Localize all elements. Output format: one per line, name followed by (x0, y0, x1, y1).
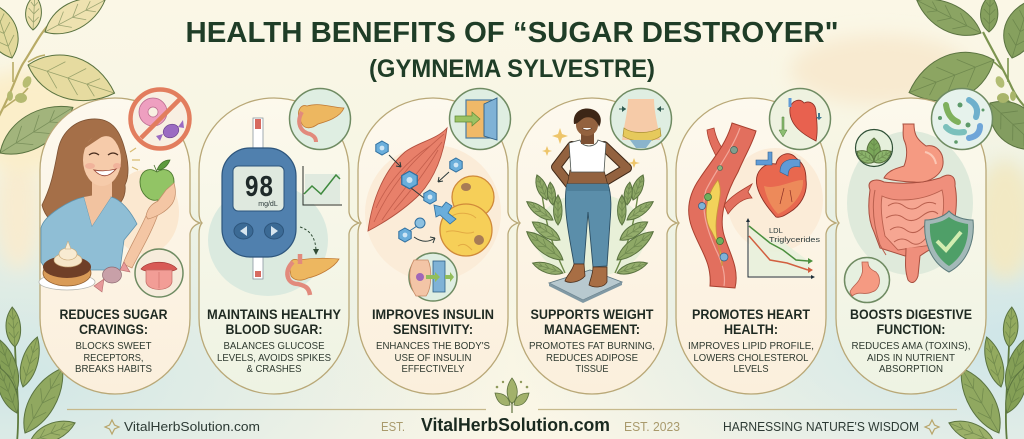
illustration: woman choosing apple over sweets (39, 119, 179, 292)
illustration: muscle and fat cells (365, 128, 501, 281)
chart: LDL and triglycerides falling: LDL (769, 226, 783, 235)
icon: tongue (135, 249, 183, 297)
text: improves insulin sensitivity: IMPROVES INSULIN (372, 307, 494, 322)
botanical: top-left leaves (0, 0, 121, 166)
text: promotes heart health (688, 307, 814, 375)
text: supports weight management (529, 307, 655, 375)
text: promotes heart health: IMPROVES LIPID PROFILE, (688, 340, 814, 352)
text: maintains healthy blood sugar: LEVELS, AVOIDS SPIKES (217, 352, 331, 364)
text: improves insulin sensitivity: SENSITIVITY: (393, 322, 473, 337)
chart: glucose trend (303, 166, 342, 205)
illustration: glucose meter: 98 (244, 171, 274, 206)
panel: reduces sugar cravings (39, 90, 200, 394)
chart: LDL and triglycerides falling: Triglycerides (769, 235, 820, 244)
text: supports weight management: PROMOTES FAT BURNING, (529, 340, 655, 352)
icon: waist measuring tape (610, 88, 672, 150)
text: promotes heart health: PROMOTES HEART (692, 307, 811, 322)
text: supports weight management: MANAGEMENT: (544, 322, 640, 337)
text: maintains healthy blood sugar: BALANCES GLUCOSE (224, 340, 324, 352)
panel: improves insulin sensitivity (358, 88, 518, 394)
text: boosts digestive function: AIDS IN NUTRIENT (867, 352, 956, 364)
icon: shield with check (925, 211, 973, 272)
illustration: glucose meter: mg/dL (258, 201, 278, 208)
text: improves insulin sensitivity (372, 307, 494, 375)
title: HEALTH BENEFITS OF “SUGAR DESTROYER" (186, 17, 838, 49)
footer center: brand: EST. 2023 (624, 419, 680, 434)
icon: stomach badge (844, 258, 890, 302)
illustration: woman on scale (542, 109, 640, 303)
title (186, 17, 838, 83)
text: reduces sugar cravings (60, 307, 168, 375)
text: promotes heart health: LEVELS (734, 363, 768, 375)
icon: pancreas bottom with dashed arrow (287, 227, 339, 295)
illustration: glucose meter (208, 118, 328, 296)
icon: no sweets (130, 90, 190, 148)
botanical: bottom-right plant (946, 307, 1024, 439)
text: maintains healthy blood sugar: BLOOD SUGAR: (226, 322, 322, 337)
text: reduces sugar cravings: CRAVINGS: (79, 322, 148, 337)
text: promotes heart health: LOWERS CHOLESTEROL (694, 352, 809, 364)
text: boosts digestive function: BOOSTS DIGESTIVE (850, 307, 972, 322)
text: boosts digestive function: ABSORPTION (879, 363, 943, 375)
text: supports weight management: REDUCES ADIPOSE (546, 352, 638, 364)
text: improves insulin sensitivity: ENHANCES THE BODY'S (376, 340, 490, 352)
icon: cell with door (409, 253, 457, 301)
panel: maintains healthy blood sugar (199, 88, 359, 394)
footer center: brand: EST. (381, 419, 405, 434)
text: maintains healthy blood sugar (207, 307, 341, 375)
icon: pancreas top (290, 88, 350, 150)
footer left: website: VitalHerbSolution.com (124, 419, 260, 434)
text: reduces sugar cravings: BLOCKS SWEET (76, 340, 152, 352)
panel: boosts digestive function (836, 88, 992, 394)
text: improves insulin sensitivity: EFFECTIVELY (402, 363, 464, 375)
text: maintains healthy blood sugar: MAINTAINS HEALTHY (207, 307, 341, 322)
text: boosts digestive function (850, 307, 972, 375)
text: boosts digestive function: REDUCES AMA (TOXINS), (852, 340, 970, 352)
chart: LDL and triglycerides falling (746, 218, 820, 279)
icon: footer sprig (495, 378, 529, 413)
botanical: bottom-left plant (0, 307, 78, 439)
illustration: heart (756, 152, 806, 217)
footer right: tagline: HARNESSING NATURE'S WISDOM (723, 419, 919, 434)
text: supports weight management: TISSUE (576, 363, 608, 375)
footer center: brand: VitalHerbSolution.com (421, 415, 610, 435)
icon: leaf badge (854, 130, 894, 167)
illustration: plants behind figure (522, 173, 657, 278)
icon: door with arrow (450, 88, 510, 150)
panel: supports weight management (517, 88, 677, 394)
title: (GYMNEMA SYLVESTRE) (369, 55, 655, 83)
text: improves insulin sensitivity: USE OF INSULIN (394, 352, 472, 364)
text: promotes heart health: HEALTH: (724, 322, 778, 337)
icon: gut bacteria (932, 88, 992, 150)
illustration: digestive system (847, 124, 973, 283)
text: boosts digestive function: FUNCTION: (876, 322, 946, 337)
illustration: artery with plaque (689, 123, 823, 288)
footer center: brand (381, 415, 680, 435)
text: reduces sugar cravings: BREAKS HABITS (75, 363, 152, 375)
text: reduces sugar cravings: REDUCES SUGAR (60, 307, 168, 322)
text: reduces sugar cravings: RECEPTORS, (84, 352, 144, 364)
text: maintains healthy blood sugar: & CRASHES (246, 363, 302, 375)
text: supports weight management: SUPPORTS WEIGHT (530, 307, 654, 322)
icon: small heart with down arrows (770, 88, 830, 150)
panel: promotes heart health (676, 88, 836, 394)
footer dividers (67, 408, 957, 410)
botanical: top-right leaves (902, 0, 1024, 163)
